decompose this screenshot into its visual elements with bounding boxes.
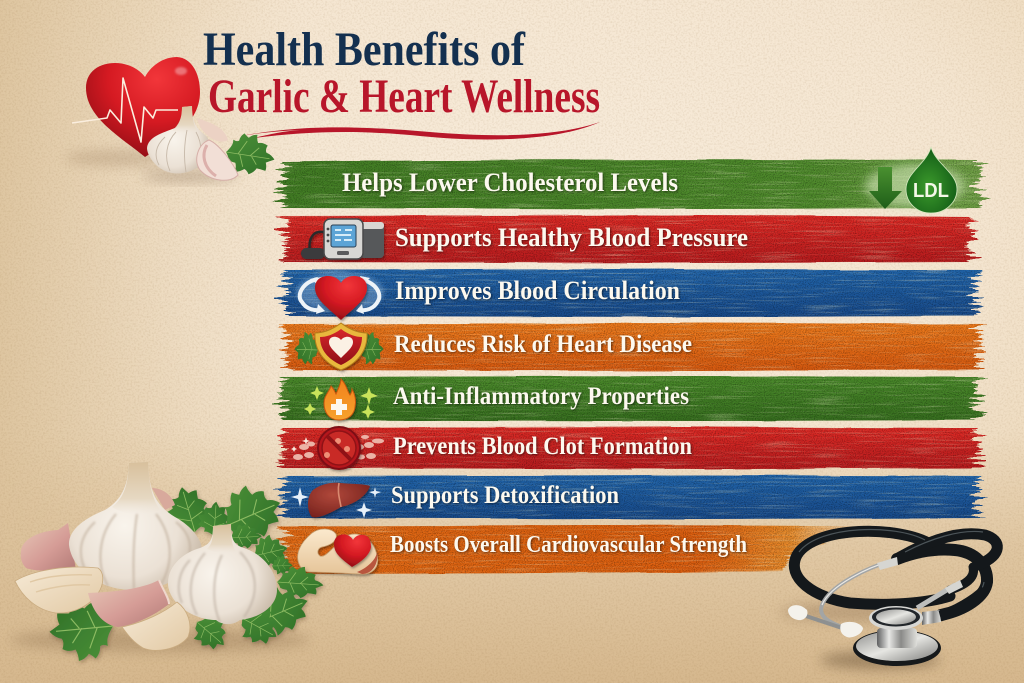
text: Prevents Blood Clot Formation	[393, 433, 692, 460]
icon: large garlic bulb	[69, 462, 202, 590]
brush stroke	[285, 323, 979, 371]
illustration: heart and garlic emblem	[65, 57, 278, 181]
title line 1: Health Benefits of	[203, 23, 526, 76]
icon: liver with sparkles	[291, 483, 381, 518]
text: Helps Lower Cholesterol Levels	[342, 168, 678, 197]
text: Reduces Risk of Heart Disease	[394, 331, 692, 358]
icon: LDL drop and down arrow	[865, 147, 965, 213]
illustration: garlic and parsley group	[10, 462, 325, 663]
icon: pulse line	[72, 78, 178, 142]
brush stroke	[285, 269, 977, 317]
chest piece stem	[877, 628, 917, 648]
title swoosh	[236, 122, 600, 139]
icon: cream clove front	[122, 602, 190, 650]
title line 2: Garlic & Heart Wellness	[208, 70, 600, 123]
panel: benefit 3 blood circulation	[285, 269, 977, 320]
text: Improves Blood Circulation	[395, 276, 680, 305]
brush stroke	[283, 475, 977, 519]
icon: pink clove front	[88, 580, 169, 627]
icon: heart with circulation arrows	[296, 272, 384, 320]
white ear tips	[788, 605, 807, 620]
icon: small garlic bulb	[168, 524, 277, 624]
brush stroke	[282, 160, 980, 209]
tubing highlights	[799, 530, 984, 612]
brush stroke	[285, 215, 973, 263]
icon: LDL drop and down arrow: LDL	[913, 180, 949, 202]
brush stroke	[283, 376, 977, 421]
panel: benefit 1 cholesterol	[282, 147, 980, 213]
metal binaurals	[821, 560, 895, 627]
panel: benefit 4 heart disease	[285, 323, 979, 371]
chest piece top	[869, 606, 923, 630]
panel: benefit 2 blood pressure	[285, 215, 973, 263]
tubing	[794, 531, 997, 615]
icon: pink clove behind	[21, 523, 76, 571]
panel: benefit 6 blood clot	[283, 427, 978, 469]
illustration: stethoscope	[780, 530, 997, 669]
chest connector	[922, 610, 941, 625]
brush stroke	[285, 525, 860, 574]
icon: parsley leaves	[48, 476, 325, 663]
icon: flame with cross and sparkles	[304, 379, 378, 420]
text: Boosts Overall Cardiovascular Strength	[390, 532, 747, 558]
chest piece base	[853, 630, 941, 666]
icon: parsley sprig	[223, 130, 278, 178]
panel: benefit 8 cardiovascular strength	[285, 525, 860, 574]
icon: red heart	[86, 57, 200, 157]
icon: blood pressure monitor	[301, 219, 384, 259]
icon: shield with heart and parsley	[294, 323, 384, 370]
text: Supports Healthy Blood Pressure	[395, 223, 748, 252]
icon: back clove	[197, 118, 228, 142]
icon: garlic bulb	[147, 106, 211, 174]
text: Supports Detoxification	[391, 482, 619, 509]
text: Anti-Inflammatory Properties	[393, 383, 689, 410]
icon: cream clove left	[15, 567, 103, 613]
brush stroke	[283, 427, 978, 469]
icon: flexed arm with heart	[298, 529, 378, 574]
icon: garlic clove	[197, 140, 238, 180]
title	[203, 23, 600, 139]
panel: benefit 5 anti-inflammatory	[283, 376, 977, 421]
icon: no-clot symbol with pills	[291, 427, 384, 469]
panel: benefit 7 detoxification	[283, 475, 977, 519]
